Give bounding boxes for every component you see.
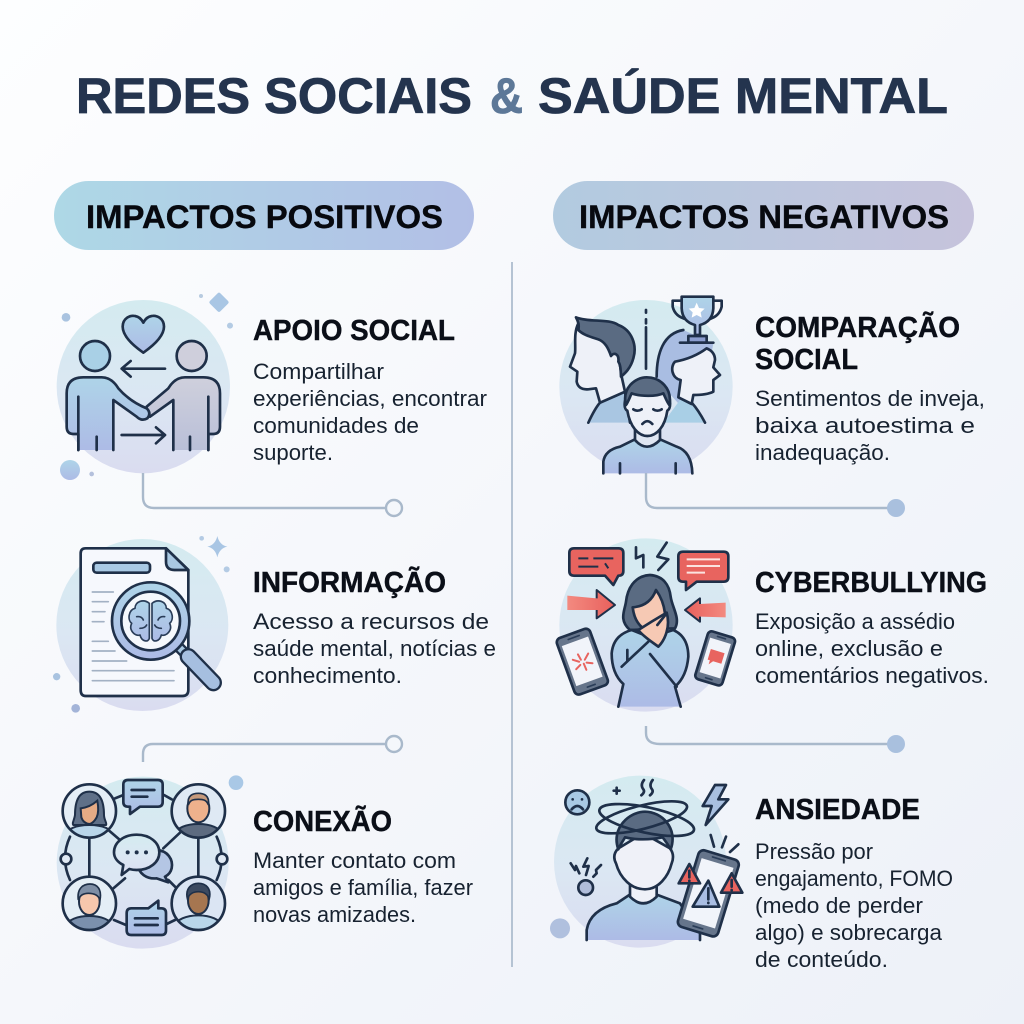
right message bubble — [678, 552, 728, 590]
phone with alerts — [677, 835, 742, 938]
left angry bubble — [569, 548, 623, 585]
icon: sad person between profiles and trophy — [559, 297, 733, 473]
heading: COMPARAÇÃO — [755, 312, 960, 344]
description: baixa autoestima e — [755, 413, 975, 438]
title: SAÚDE MENTAL — [538, 68, 948, 124]
left phone — [555, 627, 609, 696]
icon: two people shaking hands with heart — [57, 292, 233, 480]
description: Sentimentos de inveja, — [755, 386, 985, 411]
panel: informação — [53, 536, 496, 762]
avatar: man with gray hair — [63, 877, 116, 930]
icon: document with magnifier and brain — [53, 536, 230, 713]
center sad boy — [603, 377, 692, 473]
lightning — [703, 785, 728, 825]
description — [755, 386, 985, 465]
panel: apoio social — [57, 292, 487, 516]
trophy — [673, 297, 722, 343]
title: REDES SOCIAIS — [76, 68, 472, 124]
description — [253, 848, 473, 927]
connector — [646, 726, 905, 753]
connector — [143, 736, 402, 762]
description: Acesso a recursos de — [253, 609, 489, 634]
description: inadequação. — [755, 440, 890, 465]
description: Manter contato com — [253, 848, 456, 873]
icon: network of people with chat bubbles — [57, 775, 243, 949]
description: algo) e sobrecarga — [755, 920, 942, 945]
heading pill: impactos negativos: IMPACTOS NEGATIVOS — [579, 199, 949, 235]
description: novas amizades. — [253, 902, 416, 927]
description: Pressão por — [755, 839, 873, 864]
heading: SOCIAL — [755, 344, 858, 376]
description: de conteúdo. — [755, 947, 888, 972]
title: & — [490, 68, 523, 124]
heading: ANSIEDADE — [755, 794, 920, 826]
description: amigos e família, fazer — [253, 875, 473, 900]
description: conhecimento. — [253, 663, 402, 688]
panel: conexão — [57, 775, 473, 949]
avatar: woman — [63, 784, 116, 838]
sad emoji — [565, 790, 589, 814]
right phone — [694, 630, 736, 686]
description: suporte. — [253, 440, 333, 465]
heading pill: impactos positivos — [54, 181, 474, 250]
panel: cyberbullying — [555, 538, 989, 753]
description — [755, 609, 989, 688]
description: Exposição a assédio — [755, 609, 955, 634]
description: (medo de perder — [755, 893, 923, 918]
avatar: man with receding hair — [172, 784, 225, 838]
title — [76, 68, 948, 124]
description — [755, 839, 953, 972]
center divider — [511, 262, 513, 967]
heading pill: impactos negativos — [553, 181, 974, 250]
description: experiências, encontrar — [253, 386, 487, 411]
orbit rings — [594, 795, 697, 842]
description — [253, 609, 496, 688]
description: Compartilhar — [253, 359, 385, 384]
description: saúde mental, notícias e — [253, 636, 496, 661]
heading: CONEXÃO — [253, 806, 392, 838]
woman — [612, 575, 688, 707]
stress bolts with small circle — [571, 858, 601, 895]
right profile woman — [657, 330, 720, 423]
icon: dizzy person with alert phone — [550, 776, 742, 948]
connector — [143, 473, 402, 516]
heading: INFORMAÇÃO — [253, 567, 446, 599]
arrows — [567, 590, 726, 622]
left profile man — [570, 317, 635, 423]
description: comentários negativos. — [755, 663, 989, 688]
icon: distressed woman with red messages and phones — [555, 538, 736, 712]
panel: ansiedade — [550, 776, 953, 972]
heading: APOIO SOCIAL — [253, 315, 455, 347]
description: online, exclusão e — [755, 636, 943, 661]
heading pill: impactos positivos: IMPACTOS POSITIVOS — [86, 199, 443, 235]
connector — [646, 473, 905, 517]
heading: CYBERBULLYING — [755, 567, 987, 599]
avatar: man with dark curly hair — [172, 877, 225, 930]
heading — [755, 312, 960, 376]
description: engajamento, FOMO — [755, 866, 953, 891]
description — [253, 359, 487, 465]
person — [587, 812, 700, 940]
description: comunidades de — [253, 413, 419, 438]
panel: comparação social — [559, 297, 985, 517]
